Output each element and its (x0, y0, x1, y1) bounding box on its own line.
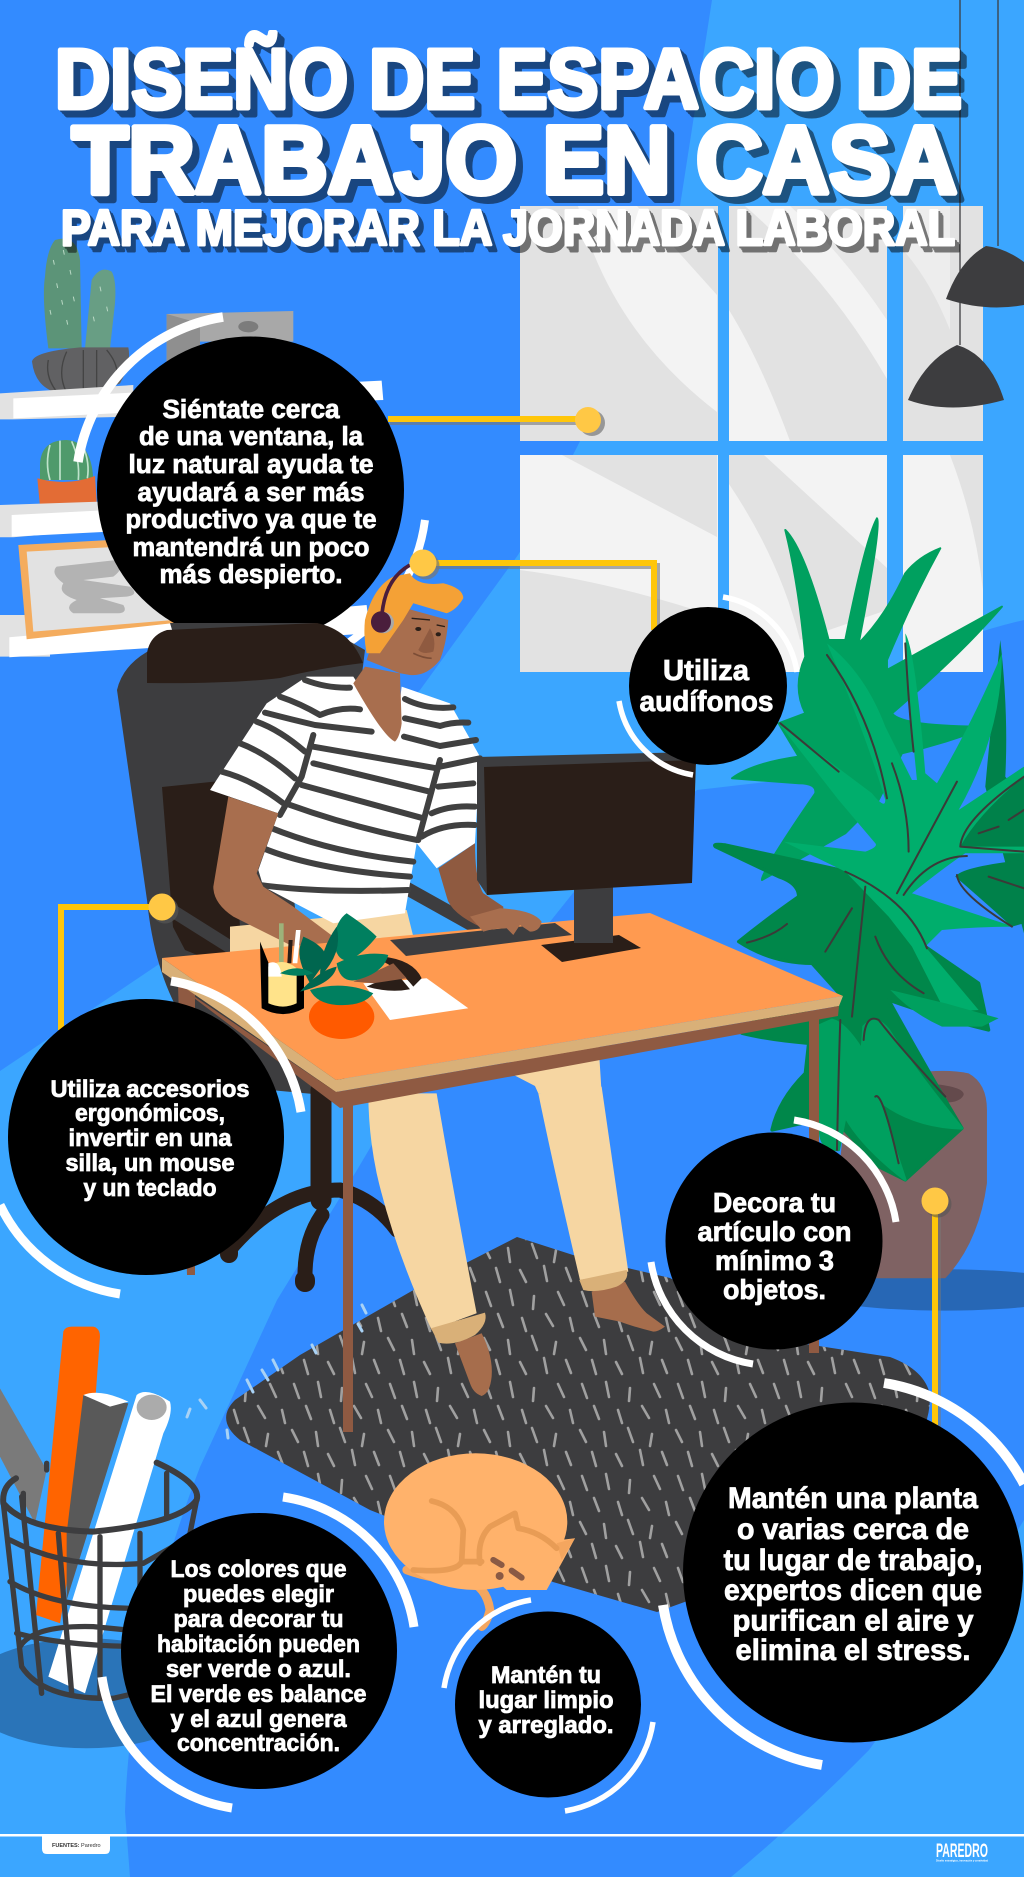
callout: decorate: objetos. (723, 1274, 826, 1305)
shirt (210, 677, 480, 923)
head (367, 607, 448, 675)
orange roll (36, 1327, 100, 1623)
chair arm left (168, 908, 238, 952)
monitor frame (477, 752, 696, 895)
rug (187, 1237, 930, 1612)
callout circle: window (97, 336, 404, 644)
man (210, 565, 665, 1396)
cat outline (413, 1501, 557, 1571)
chair back (117, 623, 365, 1096)
desk back leg (178, 985, 195, 1275)
monitor stand (574, 885, 613, 943)
footer line (0, 1834, 1024, 1836)
callout: colors: para decorar tu (174, 1606, 344, 1633)
grey roll (0, 1388, 47, 1523)
hand on keyboard (470, 908, 542, 935)
shelf bottom (0, 615, 50, 657)
headphones (382, 565, 410, 620)
small cactus (37, 440, 97, 512)
callout: plants (663, 1383, 1024, 1765)
callout: ergonomic accessories: Utiliza accesorios (50, 1076, 250, 1103)
callout arc: window (78, 317, 223, 462)
callout: colors: El verde es balance (150, 1681, 366, 1708)
desk items (260, 913, 468, 1039)
monitor base (541, 935, 641, 962)
callout: decorate: Decora tu (713, 1187, 836, 1218)
callout: keep clean: y arreglado. (478, 1712, 614, 1739)
headrest (147, 623, 363, 683)
hair (364, 573, 463, 653)
leaf: lower dark (715, 844, 989, 1180)
footer logo (936, 1841, 988, 1862)
callout: keep clean (444, 1600, 653, 1811)
chair base (229, 1090, 397, 1282)
backrest inset (162, 780, 240, 965)
cat body (384, 1453, 567, 1590)
flower pot (309, 994, 374, 1039)
title (55, 32, 962, 256)
cat tail (407, 1570, 490, 1627)
computer monitor (477, 752, 696, 962)
pendant lamps (908, 0, 1024, 408)
callout: window text: de una ventana, la (139, 423, 364, 451)
upper arm right (438, 843, 503, 928)
upper arm left (213, 797, 337, 957)
callout: keep clean: Mantén tu (491, 1662, 601, 1689)
footer source tag (42, 1835, 110, 1854)
wire basket (3, 1463, 197, 1698)
office chair (117, 623, 397, 1282)
shelf top (0, 385, 133, 419)
leaf: upper (732, 518, 1002, 880)
wall bracket (167, 311, 293, 363)
footer logo: Diseño estratégico, innovación y creatividad (936, 1858, 988, 1862)
callout: plants: o varias cerca de (737, 1513, 969, 1546)
basket shadow (0, 1638, 210, 1748)
callout: window text: más despierto. (160, 561, 342, 589)
callout: window text: productivo ya que te (126, 506, 376, 534)
pants top (230, 910, 418, 957)
callout: colors: puedes elegir (183, 1581, 334, 1608)
callout: keep clean: lugar limpio (478, 1687, 614, 1714)
callout: headphones: Utiliza (663, 655, 750, 687)
callout: decorate: artículo con (698, 1216, 852, 1247)
cat head (480, 1510, 575, 1590)
leaf: lower finger (817, 1020, 962, 1180)
pencil basket with rolls (0, 1327, 210, 1748)
pants (368, 1040, 628, 1330)
keyboard (390, 923, 572, 956)
plant pot and shadow (805, 1071, 1024, 1311)
callout: ergonomic accessories: y un teclado (84, 1175, 216, 1202)
desk edge (162, 958, 843, 1092)
callout: window text: mantendrá un poco (132, 534, 370, 562)
callout: window text (126, 396, 376, 589)
callout: plants: expertos dicen que (724, 1574, 982, 1607)
desk right leg (809, 1013, 819, 1353)
callout: colors: habitación pueden (157, 1631, 360, 1658)
flower leaves (280, 913, 388, 1005)
yellow leader line to window (388, 407, 605, 436)
callout: plants: elimina el stress. (736, 1634, 970, 1667)
yellow dot on plant pot (922, 1188, 952, 1218)
callout: decorate: mínimo 3 (715, 1245, 834, 1276)
leaf: front bright (779, 633, 1024, 1012)
yellow leader line to headphones (423, 563, 657, 630)
footer source tag: FUENTES: Paredro (52, 1843, 101, 1849)
yellow leader line to chair (61, 894, 178, 1030)
cat paws (493, 1560, 522, 1578)
paper (363, 978, 468, 1020)
window (520, 206, 983, 672)
callout: colors: Los colores que (170, 1556, 346, 1583)
callout: ergonomic accessories (0, 981, 301, 1294)
large plant (715, 518, 1024, 1180)
white roll (48, 1392, 171, 1693)
shelf middle (0, 502, 100, 537)
monitor screen (484, 760, 696, 895)
pen cup (260, 923, 304, 1014)
mouse and hand (353, 957, 422, 991)
callout: plants: purifican el aire y (732, 1604, 974, 1638)
callout: ergonomic accessories: ergonómicos, (75, 1100, 225, 1127)
callout: plants: Mantén una planta (728, 1482, 978, 1515)
callout: ergonomic accessories: silla, un mouse (66, 1150, 234, 1177)
sleeping cat (384, 1453, 575, 1627)
dark roll (67, 1395, 128, 1600)
pot (832, 1071, 987, 1278)
title line 1: DISEÑO DE ESPACIO DE (55, 32, 962, 126)
callout: colors: concentración. (177, 1730, 340, 1757)
title line 2: TRABAJO EN CASA (72, 107, 957, 214)
callout: headphones: audífonos (640, 686, 774, 718)
yellow leader line to plant (935, 1201, 938, 1432)
desk front leg (343, 1100, 353, 1432)
callout: decorate (651, 1120, 896, 1364)
callout: window text: Siéntate cerca (162, 396, 340, 424)
leaf: upright dark (985, 640, 1024, 933)
callout: colors: ser verde o azul. (166, 1656, 351, 1683)
callout: headphones (619, 597, 797, 775)
eyes (412, 618, 445, 627)
chair arm right (407, 888, 478, 928)
cactus plant (32, 239, 129, 393)
callout: colors: y el azul genera (170, 1706, 347, 1733)
feet and cuffs (431, 1270, 665, 1396)
callout arc: window lower (345, 520, 425, 645)
nose and mouth (418, 628, 434, 653)
torso and head (210, 667, 503, 957)
callout: ergonomic accessories: invertir en una (68, 1125, 232, 1152)
shelves with cactus and frame (0, 239, 383, 657)
callout: colors (102, 1497, 414, 1808)
callout: window text: ayudará a ser más (138, 479, 364, 507)
desk (162, 913, 843, 1432)
leaf veins (747, 643, 1024, 1163)
desk top (162, 913, 843, 1080)
callout: window text: luz natural ayuda te (128, 451, 374, 479)
shirt stripes (222, 680, 480, 891)
pot shadow (805, 1269, 1024, 1311)
picture frame (18, 538, 187, 639)
leaf: right dark lobes (955, 777, 1024, 927)
callout: plants: tu lugar de trabajo, (724, 1544, 982, 1577)
yellow dot on headphones (410, 550, 440, 580)
desk underside (170, 980, 839, 1108)
neck (353, 667, 402, 742)
